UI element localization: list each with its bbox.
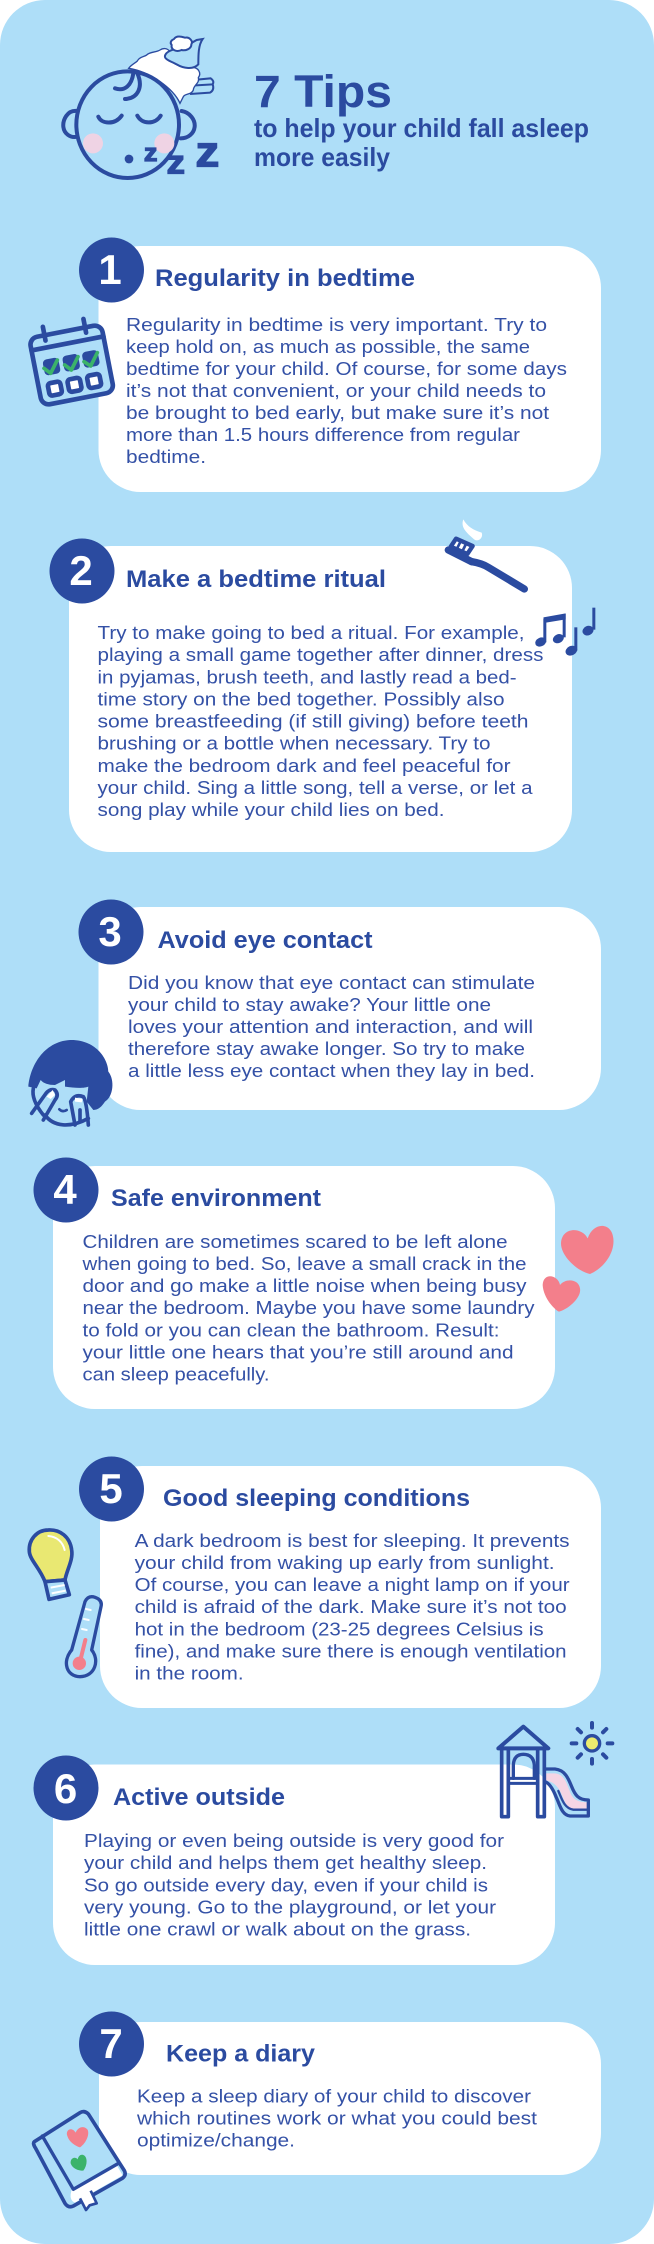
body text: be brought to bed early, but make sure it’s not <box>126 402 550 423</box>
icon: thermometer <box>66 1597 101 1677</box>
number badge <box>79 238 144 302</box>
icon: sun <box>572 1723 612 1764</box>
icon: diary book <box>34 2112 125 2210</box>
body text: which routines work or what you could best <box>136 2108 538 2128</box>
body text: Did you know that eye contact can stimulate <box>128 972 535 993</box>
body text: make the bedroom dark and feel peaceful for <box>98 755 510 776</box>
number badge: 3 <box>98 908 122 955</box>
number badge: 5 <box>99 1465 123 1512</box>
hair <box>115 73 140 99</box>
body text <box>128 972 535 1081</box>
body text: door and go make a little noise when being busy <box>82 1275 527 1296</box>
panel: tip 7 <box>34 2012 601 2210</box>
mouth <box>125 155 133 163</box>
body text: little one crawl or walk about on the grass. <box>84 1918 471 1940</box>
body text: to fold or you can clean the bathroom. Result: <box>82 1320 500 1340</box>
card <box>99 2022 601 2175</box>
number badge: 7 <box>99 2020 123 2067</box>
body text <box>135 1530 570 1684</box>
subtitle: more easily <box>254 142 391 172</box>
icon: light bulb <box>29 1530 72 1599</box>
subtitle: to help your child fall asleep <box>254 113 589 143</box>
body text: your child. Sing a little song, tell a verse, or let a <box>98 777 533 798</box>
ears <box>63 111 195 138</box>
face <box>76 71 179 178</box>
body text: your little one hears that you’re still around and <box>82 1342 514 1362</box>
body text: it’s not that convenient, or your child needs to <box>126 380 546 401</box>
icon: hearts <box>543 1226 613 1312</box>
panel: tip 1 <box>27 238 601 492</box>
heading: Avoid eye contact <box>158 927 372 954</box>
sheep <box>129 36 213 103</box>
body text <box>81 1231 535 1384</box>
closed eyes <box>98 116 161 123</box>
body text: when going to bed. So, leave a small crack in the <box>81 1253 527 1274</box>
panel: tip 2 <box>50 519 595 852</box>
body text: Regularity in bedtime is very important. Try to <box>126 314 547 335</box>
card <box>100 1466 601 1708</box>
body text: loves your attention and interaction, and will <box>128 1016 533 1037</box>
icon: music notes <box>534 608 595 657</box>
number badge <box>78 900 144 964</box>
body text <box>136 2086 538 2150</box>
body text: your child from waking up early from sunlight. <box>135 1552 555 1573</box>
body text <box>126 314 567 467</box>
body text: child is afraid of the dark. Make sure it’s not too <box>135 1596 567 1617</box>
heading: Regularity in bedtime <box>155 265 415 292</box>
heading: Good sleeping conditions <box>163 1485 470 1512</box>
icon: toothbrush <box>448 519 524 589</box>
snore letters: z <box>144 140 157 167</box>
body text: bedtime. <box>126 446 206 467</box>
body text: very young. Go to the playground, or let your <box>84 1896 496 1918</box>
body text: Playing or even being outside is very good for <box>84 1830 504 1851</box>
icon: child covering eyes <box>28 1040 112 1125</box>
body text: keep hold on, as much as possible, the same <box>126 336 530 357</box>
number badge <box>34 1158 98 1222</box>
body text: your child to stay awake? Your little one <box>128 994 491 1015</box>
body text <box>98 622 544 820</box>
number badge <box>79 1456 144 1522</box>
body text: A dark bedroom is best for sleeping. It prevents <box>135 1530 570 1551</box>
heading: Safe environment <box>111 1185 321 1212</box>
body text: Of course, you can leave a night lamp on if your <box>135 1574 570 1595</box>
body text: therefore stay awake longer. So try to make <box>128 1038 525 1059</box>
body text: near the bedroom. Maybe you have some laundry <box>82 1297 535 1318</box>
body text: bedtime for your child. Of course, for some days <box>126 358 567 379</box>
title: 7 Tips <box>254 66 392 117</box>
heading: Keep a diary <box>166 2040 315 2068</box>
body text: more than 1.5 hours difference from regular <box>126 424 520 445</box>
body text: optimize/change. <box>137 2130 295 2150</box>
body text: can sleep peacefully. <box>82 1364 270 1384</box>
body text: fine), and make sure there is enough ventilation <box>135 1640 567 1662</box>
card <box>53 1166 555 1409</box>
subtitle <box>254 113 589 172</box>
heading: Make a bedtime ritual <box>126 566 386 593</box>
number badge: 4 <box>53 1166 77 1213</box>
number badge: 1 <box>98 246 122 293</box>
panel: tip 6 <box>34 1723 612 1965</box>
cheeks <box>83 133 174 153</box>
body text: some breastfeeding (if still giving) before teeth <box>98 710 528 732</box>
icon: calendar <box>27 316 114 406</box>
body text: Try to make going to bed a ritual. For example, <box>98 622 524 643</box>
header <box>63 36 589 181</box>
body text: in the room. <box>135 1662 244 1684</box>
body text: in pyjamas, brush teeth, and lastly read a bed- <box>98 666 516 688</box>
card <box>98 246 601 492</box>
body text: time story on the bed together. Possibly also <box>98 688 504 710</box>
snore letters: z <box>195 128 219 177</box>
body text: your child and helps them get healthy sleep. <box>84 1852 487 1873</box>
panel: tip 5 <box>29 1456 601 1708</box>
panel: tip 3 <box>28 900 601 1125</box>
number badge <box>79 2012 144 2076</box>
body text: song play while your child lies on bed. <box>98 799 444 820</box>
icon: sleeping baby with sheep <box>63 36 219 181</box>
body text: Children are sometimes scared to be left alone <box>82 1231 508 1252</box>
number badge: 2 <box>69 547 93 594</box>
body text <box>84 1830 504 1940</box>
card <box>53 1764 555 1965</box>
icon: playground slide <box>498 1727 588 1817</box>
body text: a little less eye contact when they lay in bed. <box>128 1060 535 1081</box>
body text: hot in the bedroom (23-25 degrees Celsius is <box>135 1618 544 1640</box>
number badge: 6 <box>54 1765 77 1812</box>
card <box>69 546 572 852</box>
body text: brushing or a bottle when necessary. Try to <box>98 732 490 754</box>
snore letters <box>144 128 219 181</box>
number badge <box>50 538 114 604</box>
body text: Keep a sleep diary of your child to discover <box>137 2086 531 2106</box>
body text: So go outside every day, even if your child is <box>84 1874 488 1896</box>
card <box>98 907 601 1110</box>
snore letters: z <box>167 144 185 181</box>
heading: Active outside <box>113 1784 285 1811</box>
panel: tip 4 <box>34 1158 613 1409</box>
number badge <box>34 1756 98 1820</box>
body text: playing a small game together after dinner, dress <box>98 644 544 665</box>
